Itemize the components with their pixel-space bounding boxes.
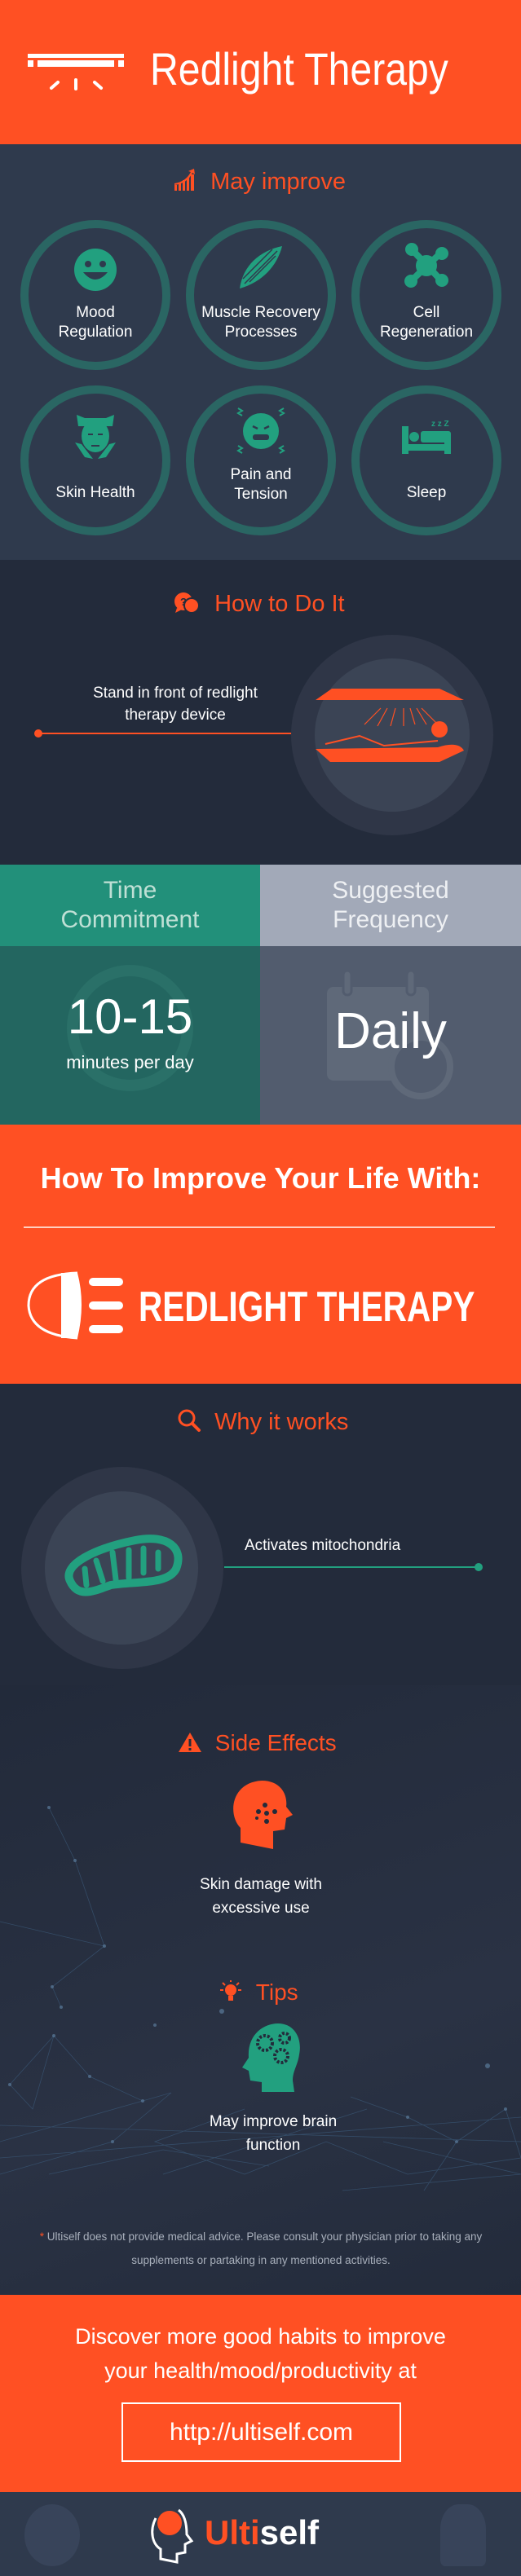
panel: call to action [0, 2295, 521, 2492]
item: sleep: Sleep [407, 484, 446, 501]
item: cell regeneration: Regeneration [380, 324, 473, 341]
panel: time commitment [0, 865, 260, 1125]
faint background icons [24, 2504, 80, 2566]
icon: headlight [28, 1271, 123, 1340]
icon: faint calendar [327, 971, 453, 1099]
connector line [224, 1563, 483, 1571]
item: sleep: z z Z [431, 420, 449, 429]
text: stand in front: therapy device [125, 707, 226, 724]
item: skin health: Skin Health [55, 484, 135, 501]
button: url [121, 2402, 401, 2462]
banner: how to improve [0, 1125, 521, 1384]
text: skin damage: excessive use [212, 1900, 310, 1917]
item: pain and tension: Pain and [230, 466, 292, 483]
text: skin damage [200, 1876, 322, 1917]
text: discover more [75, 2324, 446, 2383]
heading: how to do it: ? [180, 596, 187, 608]
logo: ultiself: Ultiself [205, 2513, 319, 2552]
text: may improve brain function [210, 2113, 337, 2154]
icon: therapy bed [291, 635, 493, 835]
header: suggested frequency: Suggested [332, 877, 449, 904]
header band [0, 0, 521, 144]
item: muscle recovery: Muscle Recovery [201, 304, 320, 321]
heading: tips: Tips [256, 1979, 298, 2005]
footer [0, 2492, 521, 2576]
heading: tips [220, 1979, 298, 2005]
text: stand in front: Stand in front of redlight [93, 685, 258, 702]
text: REDLIGHT THERAPY: REDLIGHT THERAPY [139, 1284, 475, 1331]
panel: may improve [0, 144, 521, 560]
icon: head with skin damage [233, 1781, 293, 1849]
panel: side effects and tips [0, 1685, 521, 2295]
item: muscle recovery: Processes [225, 324, 297, 341]
icon: faint clock [67, 965, 193, 1091]
text: stand in front [93, 685, 258, 724]
heading: side effects: Side Effects [215, 1730, 337, 1755]
text: disclaimer: * Ultiself does not provide medical advice. Please consult your physician prior to taking any supplements or partaking in any mentioned activities. [40, 2230, 482, 2266]
item: cell regeneration: Cell [413, 304, 439, 321]
header: suggested frequency: Frequency [333, 906, 448, 933]
text: may improve brain function: function [246, 2137, 300, 2154]
value: daily: Daily [334, 1003, 447, 1059]
icon: brain gears [242, 2023, 300, 2092]
item: pain and tension [186, 385, 336, 535]
panel: how to do it [0, 560, 521, 865]
item: mood regulation [20, 220, 170, 370]
header: time commitment [0, 865, 260, 946]
header: time commitment: Time [104, 877, 157, 904]
item: muscle recovery [186, 220, 336, 370]
text: activates mitochondria: Activates mitochondria [245, 1537, 400, 1554]
item: mood regulation: Mood [76, 304, 115, 321]
item: cell regeneration [351, 220, 501, 370]
text: how to improve your life with: How To Improve Your Life With: [41, 1161, 480, 1195]
connector line [34, 729, 292, 738]
heading: why it works: Why it works [214, 1409, 348, 1435]
heading: may improve: May improve [210, 169, 346, 195]
heading: how to do it: How to Do It [214, 591, 345, 617]
header: suggested frequency [260, 865, 521, 946]
header: time commitment: Commitment [60, 906, 200, 933]
text: discover more: your health/mood/productivity at [104, 2358, 417, 2383]
logo: ultiself [151, 2508, 320, 2564]
icon: ceiling lamp [28, 54, 124, 90]
icon: mitochondria [21, 1467, 223, 1669]
item: sleep [351, 385, 501, 535]
text: discover more: Discover more good habits to improve [75, 2324, 446, 2349]
value: 10-15: 10-15 [68, 989, 192, 1044]
panel: suggested frequency [260, 865, 521, 1125]
button: url: http://ultiself.com [170, 2419, 353, 2446]
item: skin health [20, 385, 170, 535]
item: pain and tension: Tension [234, 486, 288, 503]
title: Redlight Therapy [150, 43, 448, 95]
item: mood regulation: Regulation [59, 324, 132, 341]
panel: why it works [0, 1384, 521, 1685]
text: skin damage: Skin damage with [200, 1876, 322, 1893]
text: may improve brain function: May improve brain [210, 2113, 337, 2130]
text: minutes per day: minutes per day [66, 1052, 194, 1072]
